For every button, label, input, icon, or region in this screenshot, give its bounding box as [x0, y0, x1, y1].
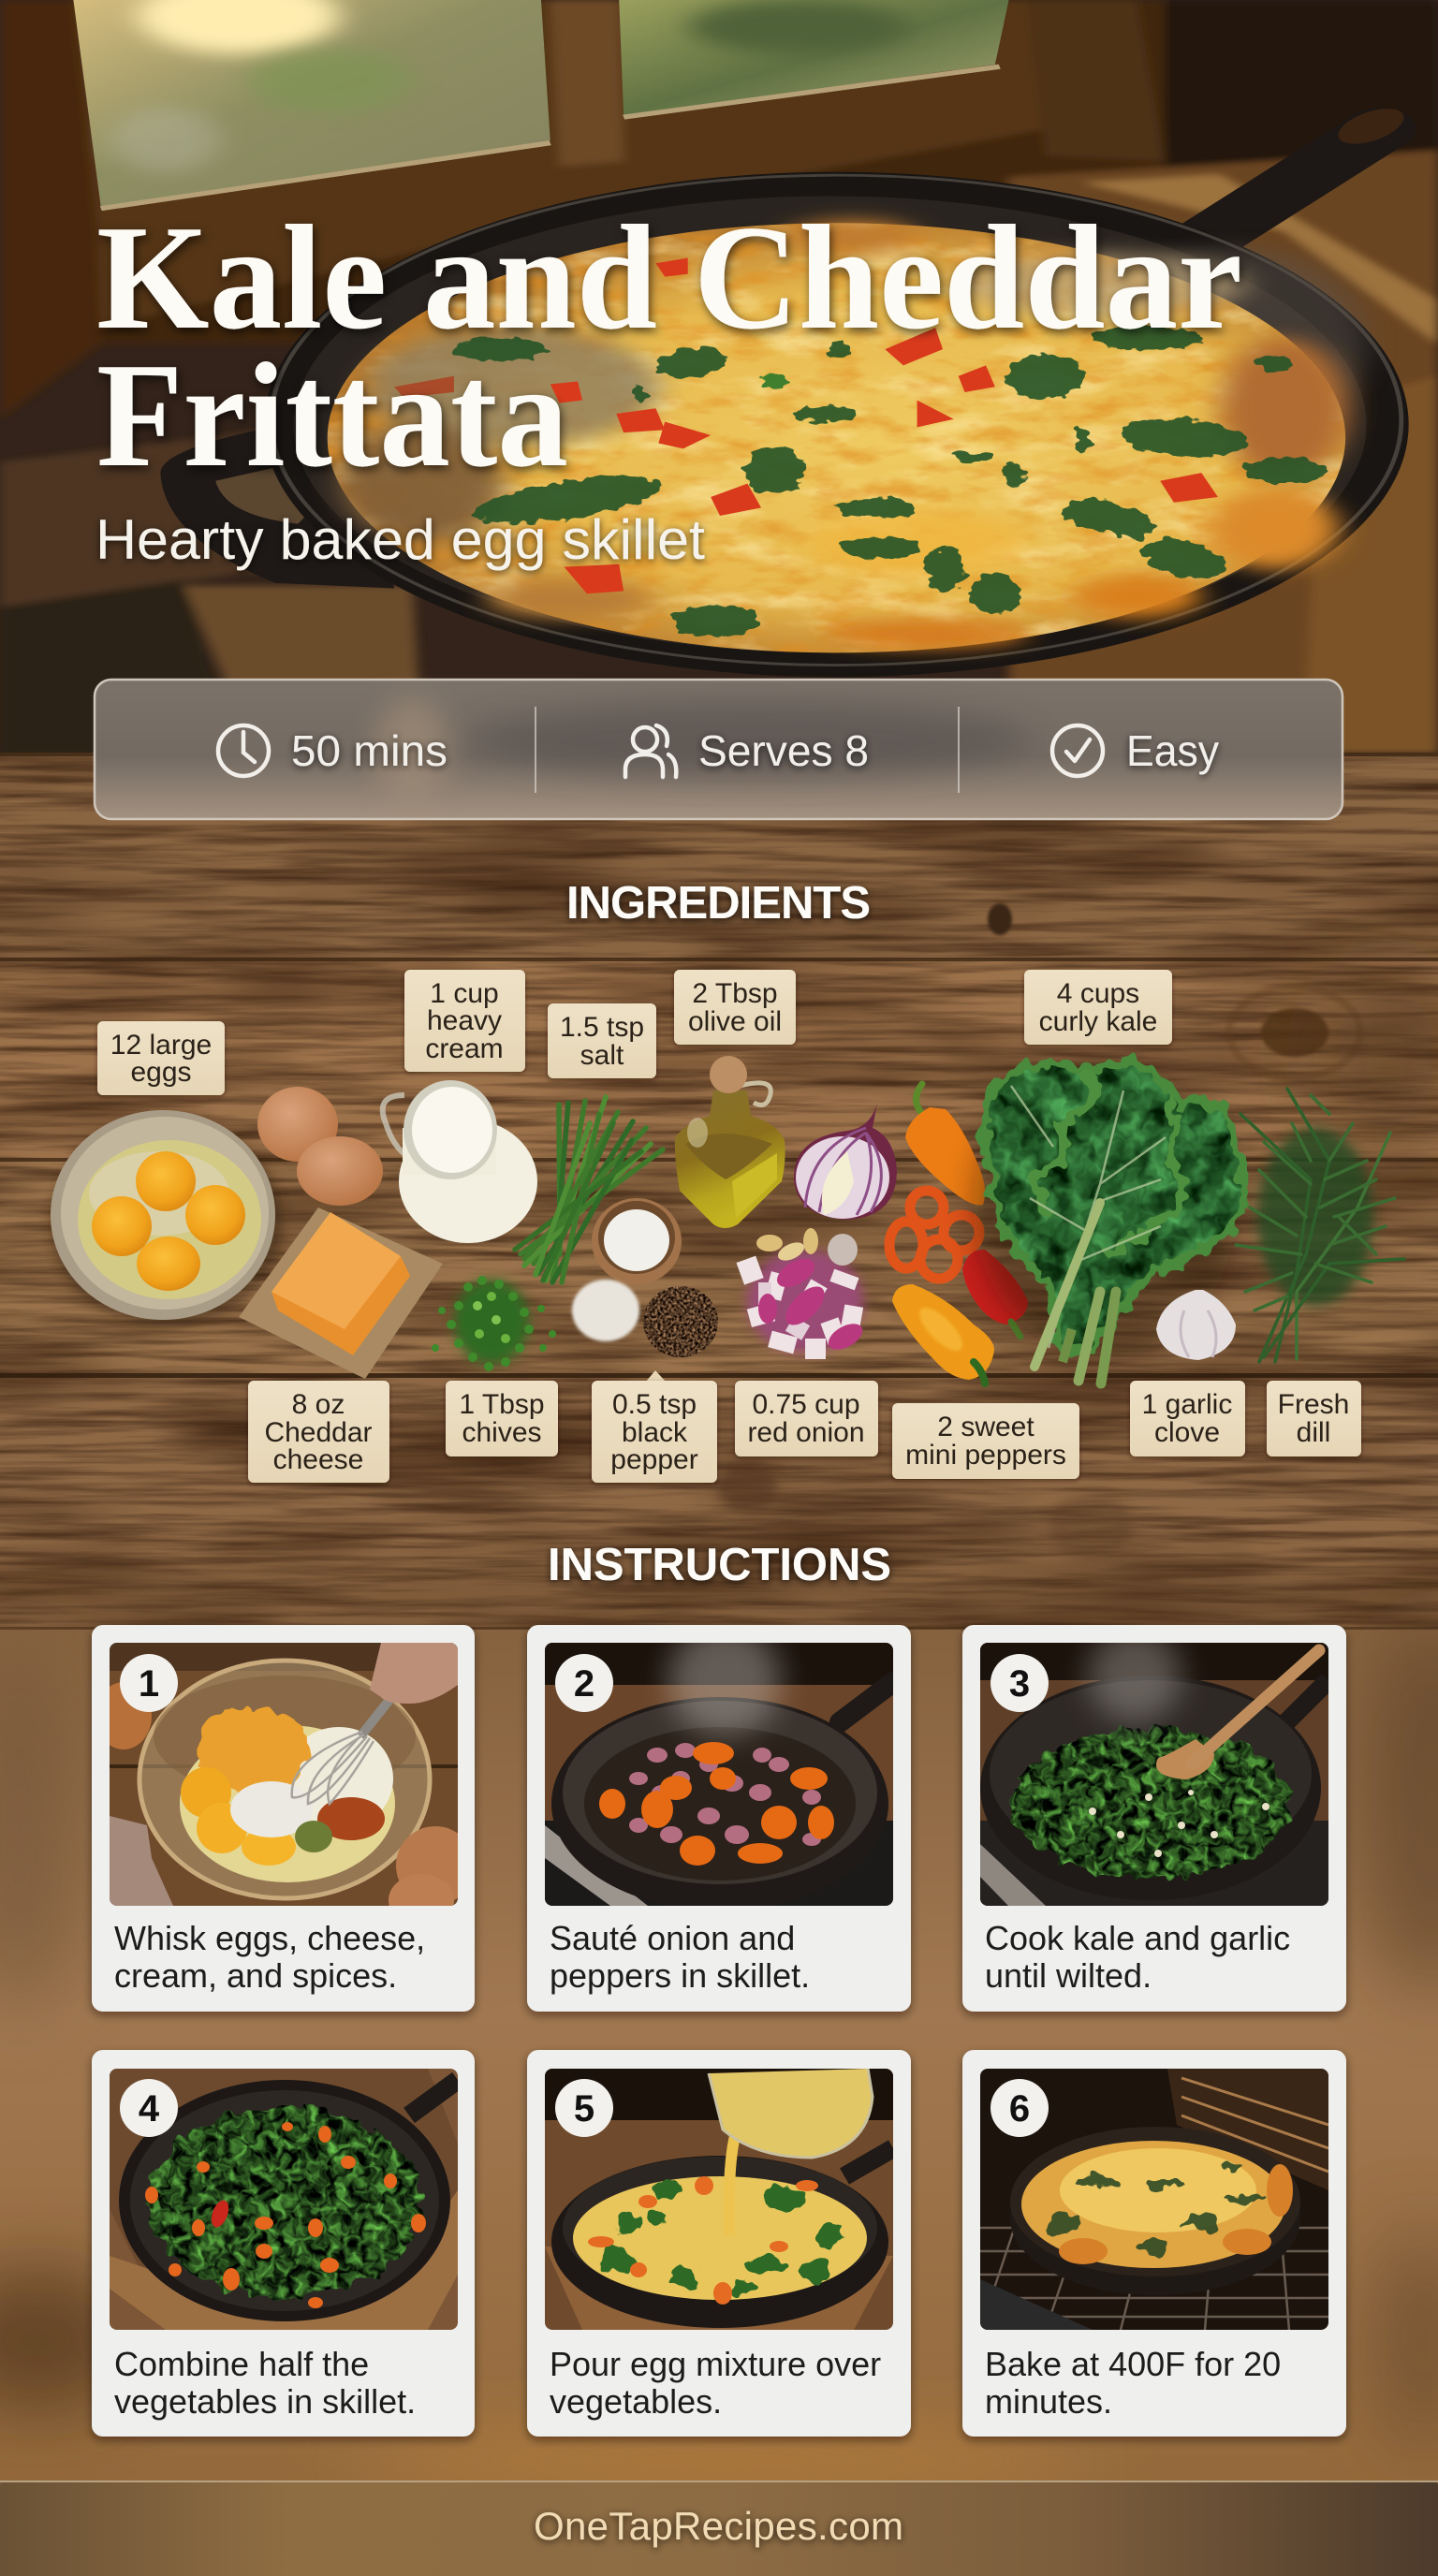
- label: 4 cups curly kale: [1024, 970, 1172, 1045]
- step 6 number: 6: [1009, 2088, 1030, 2130]
- wood table background: [0, 753, 1438, 1629]
- label: 1 Tbsp chives: [446, 1381, 558, 1456]
- label: 0.5 tsp black pepper: [592, 1370, 717, 1483]
- kale on frittata: [454, 327, 1325, 637]
- bowl of eggs: [51, 1110, 283, 1327]
- step 6 text: Bake at 400F for 20: [985, 2345, 1281, 2383]
- step 6 text: minutes.: [985, 2382, 1112, 2421]
- red onion: [794, 1103, 897, 1220]
- label: Fresh dill: [1267, 1381, 1361, 1456]
- step 1 text: Whisk eggs, cheese,: [114, 1919, 425, 1957]
- step 5 text: Pour egg mixture over: [550, 2345, 881, 2383]
- label: 0.75 cup red onion: [735, 1381, 878, 1456]
- chopped chives: [432, 1276, 556, 1371]
- step 5 card: [527, 2050, 911, 2437]
- label: 1 garlic clove: 1 garlic: [1142, 1389, 1232, 1420]
- label: 1 cup heavy cream: 1 cup: [430, 978, 499, 1009]
- step 4 text: Combine half the: [114, 2345, 369, 2383]
- title: Kale and Cheddar: [96, 194, 1242, 360]
- peppers on frittata: [394, 258, 1218, 593]
- label: 4 cups curly kale: curly kale: [1039, 1006, 1157, 1037]
- label: 8 oz Cheddar cheese: cheese: [273, 1444, 363, 1475]
- step 1 number: [120, 1654, 178, 1712]
- subtitle: Hearty baked egg skillet: [95, 508, 705, 571]
- difficulty text: Easy: [1126, 726, 1219, 775]
- icon: people: [625, 725, 676, 777]
- label: 1 cup heavy cream: heavy: [427, 1005, 502, 1036]
- label: 2 Tbsp olive oil: 2 Tbsp: [692, 978, 778, 1009]
- step 4 text: [114, 2345, 416, 2421]
- label: 2 sweet mini peppers: mini peppers: [905, 1440, 1066, 1471]
- label: 0.75 cup red onion: 0.75 cup: [752, 1389, 860, 1420]
- skillet handle: [1211, 129, 1380, 237]
- label: 8 oz Cheddar cheese: Cheddar: [264, 1417, 373, 1448]
- title: [96, 194, 1242, 498]
- label: Fresh dill: dill: [1297, 1417, 1330, 1448]
- step 2 text: [550, 1919, 810, 1995]
- label: 1 cup heavy cream: [404, 970, 525, 1072]
- label: 4 cups curly kale: 4 cups: [1057, 978, 1139, 1009]
- label: 1 Tbsp chives: chives: [462, 1417, 542, 1448]
- step 3 card: [962, 1625, 1346, 2012]
- footer website text: OneTapRecipes.com: [534, 2504, 903, 2548]
- step 3 text: Cook kale and garlic: [985, 1919, 1290, 1957]
- label: 2 sweet mini peppers: [892, 1403, 1079, 1479]
- step 3 text: [985, 1919, 1290, 1995]
- label: 1 cup heavy cream: cream: [425, 1033, 504, 1064]
- label: 12 large eggs: [97, 1021, 225, 1095]
- icon: check circle: [1052, 725, 1103, 776]
- label: 0.5 tsp black pepper: black: [622, 1417, 688, 1448]
- chopped red onion: [736, 1228, 867, 1359]
- footer bar: [0, 2481, 1438, 2576]
- servings text: Serves 8: [698, 726, 869, 775]
- step 5 photo: pouring egg mixture: [545, 2069, 893, 2330]
- salt bowl: [592, 1198, 682, 1284]
- title: Frittata: [96, 331, 568, 498]
- step 5 text: [550, 2345, 881, 2421]
- step 4 number: 4: [139, 2088, 160, 2130]
- step 5 text: vegetables.: [550, 2382, 722, 2421]
- chives bunch: [515, 1097, 663, 1282]
- step 2 card: [527, 1624, 911, 2012]
- step 3 number: [990, 1654, 1049, 1712]
- hero photo: skillet by window: [0, 0, 1438, 754]
- salt and pepper piles: [572, 1280, 718, 1357]
- olive oil bottle: [675, 1056, 785, 1228]
- step 1 photo: whisking in glass bowl: [110, 1643, 458, 1906]
- frittata: [328, 223, 1345, 652]
- step 3 photo: cooking kale: [980, 1629, 1328, 1906]
- label: 1 Tbsp chives: 1 Tbsp: [459, 1389, 545, 1420]
- whole eggs: [257, 1087, 383, 1206]
- step 4 text: vegetables in skillet.: [114, 2382, 416, 2421]
- step 1 text: cream, and spices.: [114, 1956, 397, 1995]
- cheddar on paper: [239, 1208, 443, 1379]
- label: 1.5 tsp salt: [548, 1003, 656, 1078]
- step 2 photo: sauteing vegetables: [545, 1624, 893, 1910]
- fresh dill: [1236, 1089, 1404, 1362]
- lower section background: [0, 1619, 1438, 2499]
- window frame wood: [71, 0, 1043, 322]
- step 6 number: [990, 2079, 1049, 2137]
- skillet helper handle: [160, 424, 394, 589]
- skillet: [264, 172, 1409, 677]
- step 1 card: [92, 1625, 475, 2012]
- step 5 number: [555, 2079, 613, 2137]
- label: 1.5 tsp salt: salt: [580, 1040, 624, 1071]
- label: 0.5 tsp black pepper: pepper: [610, 1444, 698, 1475]
- step 3 number: 3: [1009, 1663, 1030, 1705]
- step 6 photo: frittata baking in oven: [980, 2069, 1328, 2330]
- label: 1.5 tsp salt: 1.5 tsp: [560, 1012, 644, 1043]
- label: 1 garlic clove: clove: [1154, 1417, 1220, 1448]
- yellow mini pepper: [892, 1284, 994, 1383]
- label: 2 Tbsp olive oil: olive oil: [688, 1006, 782, 1037]
- label: 8 oz Cheddar cheese: [248, 1381, 389, 1483]
- table planks, lit right side: [1009, 151, 1438, 754]
- ingredient illustrations: [51, 1056, 1404, 1383]
- step 2 text: Sauté onion and: [550, 1919, 795, 1957]
- step 1 text: [114, 1919, 425, 1995]
- window glass panes: [73, 0, 550, 207]
- pitcher of cream: [383, 1080, 537, 1243]
- label: 2 Tbsp olive oil: [674, 970, 796, 1045]
- step 6 card: [962, 2050, 1346, 2437]
- red mini pepper: [962, 1250, 1028, 1337]
- heading: ingredients: INGREDIENTS: [566, 878, 871, 929]
- step 3 text: until wilted.: [985, 1956, 1152, 1995]
- orange mini pepper: [905, 1084, 985, 1206]
- label: 12 large eggs: 12 large: [110, 1030, 212, 1061]
- label: 12 large eggs: eggs: [130, 1057, 192, 1088]
- pepper rings: [889, 1191, 979, 1279]
- label: 1 garlic clove: [1130, 1381, 1245, 1456]
- step 5 number: 5: [574, 2088, 594, 2130]
- step 2 text: peppers in skillet.: [550, 1956, 810, 1995]
- label: 0.5 tsp black pepper: 0.5 tsp: [612, 1389, 697, 1420]
- time text: 50 mins: [291, 726, 448, 775]
- step 4 photo: vegetables in skillet: [110, 2069, 458, 2330]
- label: 8 oz Cheddar cheese: 8 oz: [292, 1389, 345, 1420]
- info bar: time, servings, difficulty: [94, 679, 1343, 820]
- step 6 text: [985, 2345, 1281, 2421]
- garlic: [1156, 1290, 1236, 1360]
- step 2 number: [555, 1654, 613, 1712]
- icon: clock: [218, 725, 269, 776]
- label: Fresh dill: Fresh: [1278, 1389, 1349, 1420]
- heading: instructions: INSTRUCTIONS: [548, 1540, 891, 1590]
- step 1 number: 1: [139, 1663, 159, 1705]
- step 4 number: [120, 2079, 178, 2137]
- label: 2 sweet mini peppers: 2 sweet: [937, 1412, 1034, 1442]
- step 4 card: [92, 2050, 475, 2437]
- kale leaves: [974, 1058, 1243, 1383]
- ingredient labels: [97, 970, 1361, 1483]
- label: 0.75 cup red onion: red onion: [747, 1417, 865, 1448]
- step 2 number: 2: [574, 1663, 594, 1705]
